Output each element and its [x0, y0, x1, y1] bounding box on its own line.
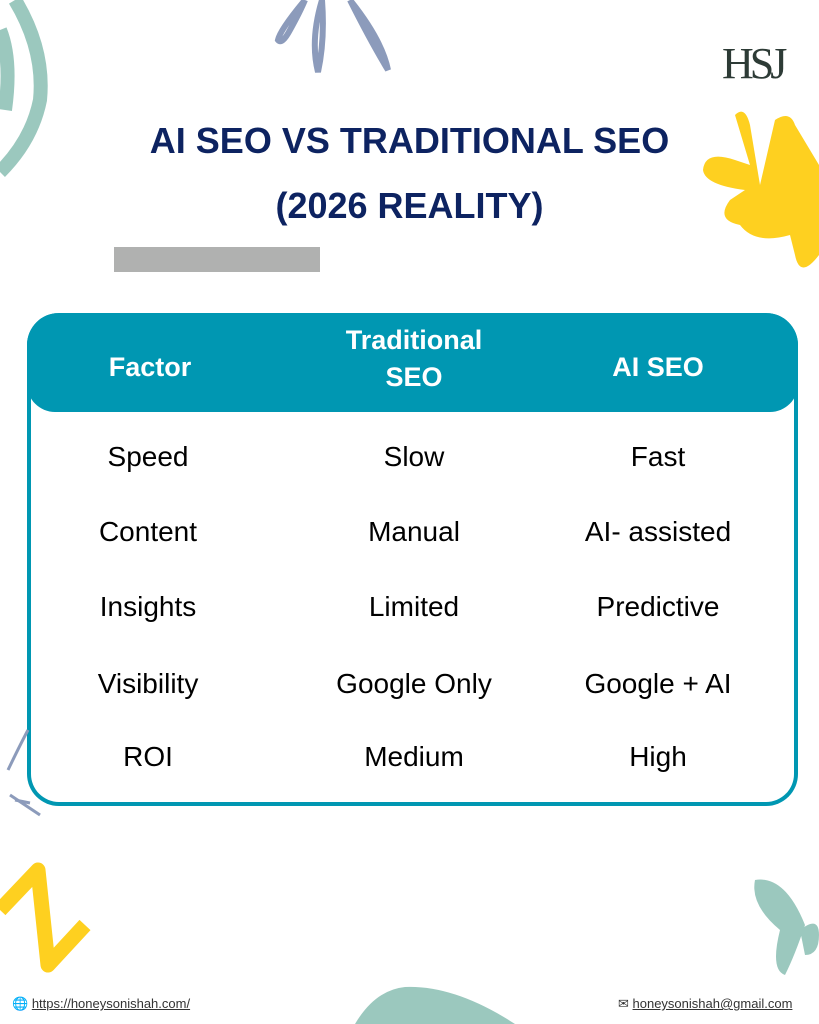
row: Speed: Fast: [631, 441, 685, 472]
decoration: gray bar: [114, 247, 320, 272]
logo: HSJ: HSJ: [722, 39, 783, 88]
row: Visibility: [98, 668, 732, 699]
decoration: blue scribble left: [6, 729, 41, 816]
row: Visibility: Google Only: [336, 668, 492, 699]
row: Visibility: Google + AI: [584, 668, 732, 699]
row: Visibility: Visibility: [98, 668, 198, 699]
subtitle: (2026 REALITY): [275, 185, 544, 226]
row: Content: AI- assisted: [585, 516, 731, 547]
row: Content: [99, 516, 731, 547]
decoration: yellow zigzag: [0, 862, 90, 972]
decoration: blue petals top: [274, 0, 391, 73]
decoration: yellow splash: [703, 112, 819, 268]
footer: website: 🌐 https://honeysonishah.com/: [12, 996, 190, 1011]
header: Traditional SEO: [346, 325, 482, 392]
row: ROI: ROI: [123, 741, 173, 772]
footer: email: ✉ honeysonishah@gmail.com: [618, 996, 792, 1011]
title: AI SEO VS TRADITIONAL SEO: [150, 120, 669, 161]
row: ROI: Medium: [364, 741, 464, 772]
row: Content: Content: [99, 516, 197, 547]
decoration: teal arc top-left: [0, 0, 48, 177]
row: Content: Manual: [368, 516, 460, 547]
header: AI SEO: AI SEO: [612, 352, 704, 382]
row: ROI: High: [629, 741, 687, 772]
table header: [27, 313, 798, 412]
row: Insights: [100, 591, 719, 622]
row: Speed: [108, 441, 686, 472]
row: Insights: Insights: [100, 591, 196, 622]
header: Factor: Factor: [109, 352, 191, 382]
table panel: [27, 313, 798, 806]
row: Speed: Speed: [108, 441, 188, 472]
row: Insights: Limited: [369, 591, 459, 622]
decoration: teal shape bottom: [355, 986, 515, 1024]
row: Speed: Slow: [384, 441, 444, 472]
row: ROI: [123, 741, 687, 772]
header: Traditional SEO: SEO: [385, 362, 443, 392]
row: Insights: Predictive: [597, 591, 719, 622]
header: Traditional SEO: Traditional: [346, 325, 482, 355]
decoration: teal leaf bottom-right: [754, 880, 819, 975]
